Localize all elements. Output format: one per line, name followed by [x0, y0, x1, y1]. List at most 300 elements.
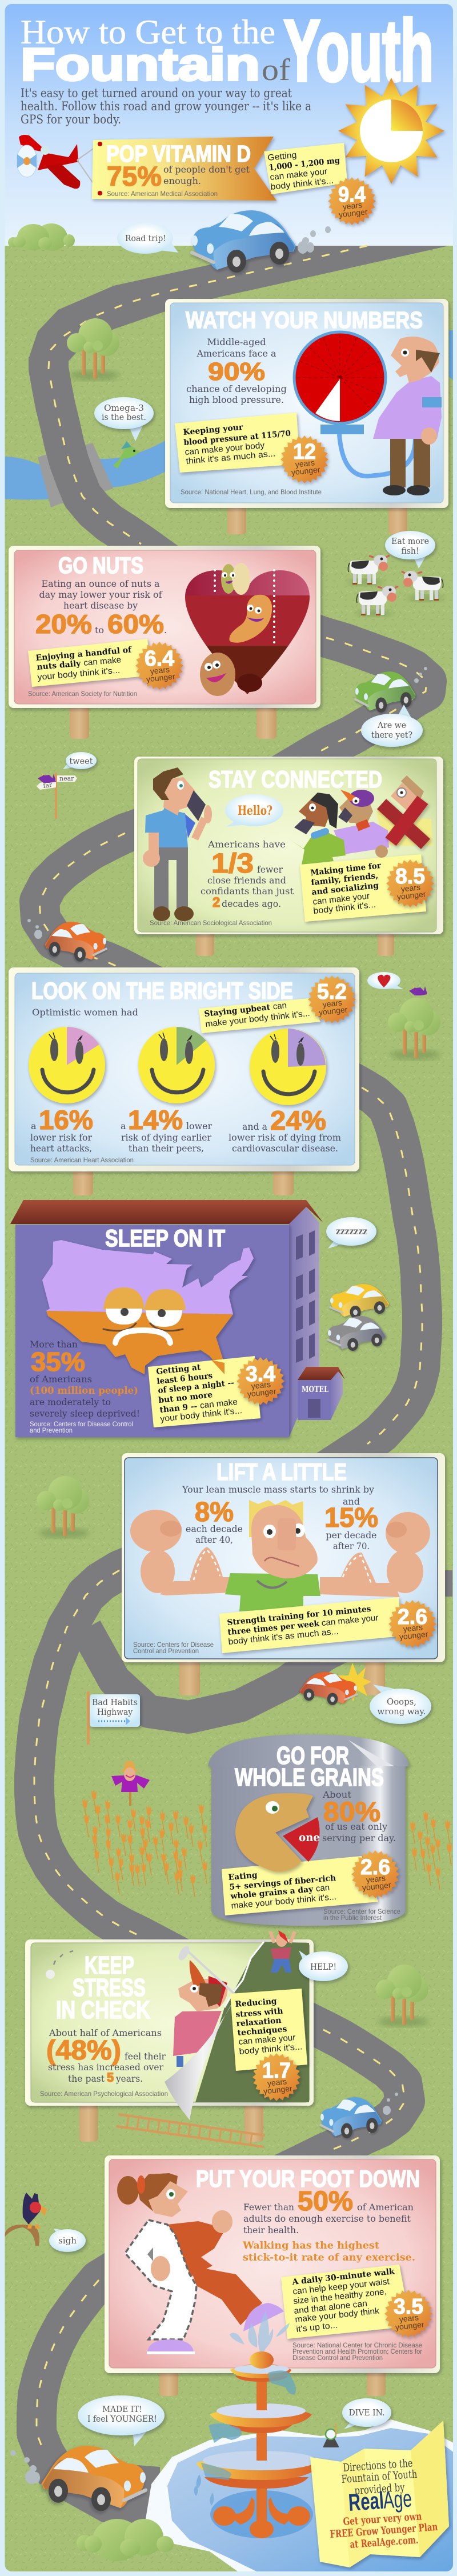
speech bubble: tweet — [63, 752, 97, 769]
signpost: near and far: far — [43, 781, 53, 790]
note: grains: whole grains a day — [230, 1885, 314, 1901]
stat text — [322, 1789, 396, 1843]
stat: 24%: 24% — [270, 1105, 326, 1135]
note: strength: can make your — [321, 1613, 379, 1628]
note: upbeat: can — [272, 1001, 287, 1011]
icon: snorkeler — [323, 2424, 339, 2447]
bush — [77, 2519, 174, 2561]
panel: go nuts: 60% — [107, 609, 164, 639]
stat: 14%: 14% — [128, 1105, 183, 1135]
scarecrow — [111, 1761, 150, 1806]
speech bubble: road trip — [117, 223, 178, 254]
note: grains — [222, 1856, 378, 1915]
panel: put your foot down — [105, 2155, 440, 2396]
title: How to Get to the — [21, 13, 275, 51]
source: Source: American Psychological Association — [40, 2090, 168, 2098]
note: blood pressure: think it's as much as... — [186, 449, 276, 466]
stat text: day may lower your risk of — [39, 589, 163, 600]
stat text: chance of developing — [186, 383, 287, 394]
heading: STRESS — [73, 1974, 146, 2002]
source: and Prevention — [30, 1426, 73, 1434]
note: sleep: your body think it's... — [160, 1406, 243, 1424]
speech bubble: sigh: sigh — [58, 2235, 77, 2246]
stat text: About — [322, 1789, 352, 1800]
chart: smiley pie 24% — [250, 1029, 326, 1105]
speech bubble: eat more fish: fish! — [401, 546, 419, 556]
badge: 5.2 years younger: years — [322, 998, 343, 1009]
water spray — [230, 2311, 290, 2351]
badge: 3.5 years younger — [384, 2290, 432, 2338]
stat: 14%: risk of dying earlier — [121, 1132, 211, 1143]
note: stress: body think it's... — [239, 2042, 303, 2057]
stat text: 1/3 — [211, 849, 254, 879]
stat: 24% — [228, 1105, 341, 1154]
badge: 3.5 years younger: younger — [395, 2319, 425, 2331]
source: Control and Prevention — [133, 1647, 199, 1655]
note: nuts: can make — [83, 655, 122, 668]
stat text — [30, 1339, 140, 1419]
icon: fish — [113, 441, 139, 469]
stat: 15%: 15% — [324, 1503, 378, 1533]
heading: LOOK ON THE BRIGHT SIDE — [31, 977, 293, 1004]
intro text: It's easy to get turned around on your way to great — [21, 86, 292, 100]
callout: walking: stick-to-it rate of any exercise. — [243, 2252, 415, 2263]
panel: go nuts: to — [95, 625, 104, 635]
speech bubble: help: HELP! — [310, 1962, 336, 1972]
stat: 14%: lower — [186, 1121, 212, 1131]
stat 75%: 75% — [107, 162, 162, 192]
chart: US map — [42, 1240, 254, 1374]
badge: 8.5 years younger: younger — [396, 889, 427, 901]
icon: vulture on branch — [5, 2193, 48, 2246]
source: Source: National Center for Chronic Disease — [292, 2341, 422, 2349]
chart: smiley pie 14% — [138, 1027, 215, 1103]
river — [4, 440, 171, 499]
badge: 9.4 years younger: 9.4 — [338, 183, 366, 207]
torn dark panel — [195, 1942, 309, 2102]
note: grains: Eating — [228, 1871, 258, 1882]
stat text — [243, 2186, 414, 2235]
stat text: of Americans — [30, 1374, 92, 1385]
stat text: decades ago. — [222, 898, 281, 909]
stat: 15% — [324, 1496, 378, 1551]
stat text: are moderately to — [30, 1397, 111, 1407]
note: strength: Strength training for 10 minutes — [227, 1605, 371, 1627]
bridge — [38, 443, 113, 507]
banner: pop vitamin D: Source: American Medical Association — [107, 190, 218, 198]
cows — [347, 555, 444, 617]
speech bubble: road trip: Road trip! — [125, 233, 166, 243]
heading: STAY CONNECTED — [209, 766, 382, 793]
note: sleep: than 9 -- — [159, 1402, 198, 1415]
badge: 9.4 years younger: younger — [338, 207, 368, 219]
badge: 5.2 years younger — [308, 975, 356, 1023]
badge: 12 years younger: younger — [291, 465, 320, 477]
speech bubble: are we there yet: Are we — [377, 720, 406, 730]
note: stress: can make your — [238, 2033, 296, 2047]
map: directions: Directions to the — [343, 2457, 413, 2474]
speech bubble: hello — [225, 794, 283, 827]
title — [22, 16, 431, 83]
speech bubble: help — [299, 1950, 348, 1981]
stat: 24%: cardiovascular disease. — [232, 1143, 338, 1154]
source: Source: American Heart Association — [30, 1156, 134, 1164]
badge: 3.4 years younger: years — [251, 1379, 271, 1391]
source: Source: American Society for Nutrition — [28, 690, 137, 698]
speech bubble: ooops — [370, 1685, 431, 1724]
badge: 1.7 years younger — [252, 2053, 300, 2101]
badge: 9.4 years younger — [328, 177, 376, 225]
badge: 1.7 years younger: younger — [263, 2083, 293, 2095]
map: directions: Get your very own — [343, 2510, 422, 2528]
note: sleep: least 6 hours — [157, 1371, 213, 1386]
speech bubble: ooops: wrong way. — [377, 1706, 426, 1717]
stat text: stress has increased over — [48, 2062, 163, 2073]
middle tier — [209, 2383, 312, 2443]
speech bubble: are we there yet: there yet? — [371, 730, 412, 740]
map: directions: provided by — [354, 2481, 405, 2497]
speech bubble: zzz: zzzzzzz — [336, 1226, 367, 1237]
stat text: 50% — [298, 2186, 353, 2217]
note: stress: techniques — [237, 2025, 287, 2038]
stat text: high blood pressure. — [189, 394, 284, 405]
note: strength — [219, 1597, 402, 1653]
source: Prevention and Health Promotion; Centers for — [292, 2347, 422, 2355]
stat text: of us eat only — [325, 1821, 387, 1832]
car: small blue — [320, 2093, 398, 2138]
figure: man with cuff — [373, 337, 442, 495]
tree — [37, 1476, 89, 1538]
note: vitamin D: Getting — [267, 150, 297, 163]
map: directions: Fountain of Youth — [341, 2468, 418, 2486]
source — [30, 1420, 133, 1434]
stat: 24%: lower risk of dying from — [228, 1132, 341, 1143]
speech bubble: tweet: tweet — [70, 756, 93, 766]
source: Source: Centers for Disease Control — [30, 1420, 133, 1428]
speech bubble: omega-3: is the best. — [102, 412, 146, 422]
map: directions — [310, 2421, 449, 2567]
stat: 14%: than their peers, — [129, 1143, 204, 1154]
stat text: 35% — [31, 1347, 85, 1377]
note: stress — [230, 1989, 307, 2071]
speech bubble: eat more fish — [385, 531, 435, 569]
heading: SLEEP ON IT — [105, 1225, 225, 1251]
top tier — [230, 2351, 296, 2394]
panel: sleep on it motel building — [10, 1200, 323, 1437]
figure: walking woman — [117, 2173, 284, 2354]
badge: 3.4 years younger: younger — [247, 1386, 276, 1398]
title: of — [262, 53, 290, 87]
speech bubble: made it: I feel YOUNGER! — [87, 2414, 157, 2424]
panel: keep stress in check — [25, 1939, 314, 2142]
stat text: feel their — [125, 2051, 166, 2062]
panel: go nuts — [9, 546, 320, 739]
note: nuts: nuts daily — [37, 659, 82, 672]
source: Source: Center for Science — [323, 1907, 400, 1915]
badge: 9.4 years younger: years — [342, 200, 363, 211]
bottom tier — [194, 2434, 320, 2506]
car: yellow — [330, 1284, 389, 1318]
note: blood pressure: Keeping your — [183, 423, 244, 437]
note: connected: Making time for — [310, 861, 382, 878]
badge: 8.5 years younger — [386, 859, 434, 907]
stat: 16%: a — [31, 1121, 37, 1131]
heading: POP VITAMIN D — [106, 141, 251, 167]
heading: LIFT A LITTLE — [217, 1458, 347, 1485]
note: connected: family, friends, — [311, 871, 379, 887]
note: grains: make your body think it's... — [231, 1892, 337, 1911]
signpost: near and far: near — [59, 775, 74, 782]
source: in the Public Interest — [323, 1914, 382, 1922]
stat text — [186, 337, 287, 405]
stat text: serving per day. — [322, 1833, 396, 1843]
badge: 12 years younger: years — [295, 458, 315, 469]
note: nuts: your body think it's... — [37, 665, 121, 682]
speech bubble: hello: Hello? — [238, 803, 272, 818]
tree — [376, 1965, 428, 2027]
panel: lift a little — [122, 1453, 445, 1695]
stat: 15%: and — [343, 1496, 360, 1507]
stat text: More than — [30, 1339, 78, 1350]
panel: go for whole grains silo: WHOLE GRAINS — [235, 1763, 384, 1791]
golf ball with dashed arc — [46, 1951, 73, 1979]
note: sleep: Getting at — [156, 1363, 202, 1377]
stat text: years. — [115, 2073, 143, 2084]
note: sleep: but no more — [158, 1390, 213, 1405]
pond — [146, 2419, 455, 2574]
badge: 1.7 years younger: years — [267, 2077, 287, 2088]
heading: GO NUTS — [58, 553, 143, 578]
heading — [56, 1951, 150, 2024]
note: sleep — [148, 1356, 260, 1427]
car: green — [355, 667, 427, 713]
note: walking: can help keep your waist — [292, 2277, 390, 2297]
note: walking: and that alone can — [294, 2299, 368, 2316]
stat text: fewer — [257, 864, 283, 875]
stat text: About half of Americans — [49, 2027, 162, 2038]
note: stress: Reducing — [235, 1997, 277, 2009]
heading: GO FOR — [276, 1742, 349, 1770]
stat text: their health. — [243, 2225, 299, 2235]
figure: man with small arms — [130, 1500, 430, 1611]
chart: blood pressure gauge pie — [294, 332, 420, 476]
bad habits highway branch — [86, 1629, 366, 1717]
icon: red X — [382, 800, 426, 844]
stat text: close friends and — [207, 875, 286, 886]
stat text: 2 — [213, 895, 220, 910]
badge: 3.5 years younger: years — [399, 2313, 419, 2324]
panel: go nuts: 20% — [35, 609, 92, 639]
figure: man on phone — [143, 767, 212, 921]
car: gray — [328, 1316, 386, 1351]
stat text: of American — [357, 2202, 414, 2213]
stat text: the past — [68, 2073, 105, 2084]
logo: RealAge: Age — [382, 2485, 412, 2514]
banner: pop vitamin D — [92, 137, 276, 201]
logo: RealAge: Real — [347, 2487, 384, 2516]
note: vitamin D: can make your — [270, 167, 328, 182]
bush — [8, 223, 75, 251]
signpost: near and far — [37, 772, 77, 819]
note: sleep: can make — [199, 1397, 238, 1411]
icon: ladder — [117, 2114, 265, 2147]
stat text: (100 million people) — [30, 1385, 138, 1397]
tree — [67, 318, 119, 381]
stat text: 80% — [323, 1797, 380, 1827]
badge: 6.4 years younger: younger — [146, 671, 176, 683]
badge: 3.5 years younger: 3.5 — [394, 2295, 423, 2319]
badge: 2.6 years younger: younger — [362, 1880, 392, 1892]
heading: KEEP — [85, 1951, 134, 1979]
source — [133, 1641, 214, 1655]
note: blood pressure — [175, 413, 300, 473]
stat text: Fewer than — [243, 2202, 294, 2213]
stat text — [201, 839, 294, 910]
stat: 8%: 8% — [195, 1497, 234, 1527]
speech bubble: made it — [78, 2395, 165, 2446]
speech bubble: omega-3 — [94, 397, 154, 441]
banner: pop vitamin D: of people don't get — [163, 164, 250, 175]
stat text: heart disease by — [63, 600, 138, 611]
speech bubble: ooops: Ooops, — [387, 1697, 416, 1707]
badge: 5.2 years younger: 5.2 — [317, 980, 347, 1004]
stat: 8% — [186, 1497, 243, 1545]
title: Fountain — [21, 39, 260, 90]
car: blue — [192, 210, 331, 273]
source: Disease Control and Prevention — [292, 2354, 383, 2362]
note: strength: three times per week — [227, 1619, 320, 1637]
stat text: Middle-aged — [207, 337, 266, 347]
stat: 14% — [121, 1105, 212, 1154]
intro text: health. Follow this road and grow younger -- it's like a — [21, 99, 311, 113]
tree with bird — [388, 985, 440, 1060]
badge: 6.4 years younger — [135, 642, 183, 690]
note: walking: it's up to... — [296, 2320, 338, 2334]
badge: 8.5 years younger: 8.5 — [395, 865, 425, 889]
note: connected: body think it's... — [313, 900, 376, 916]
source — [292, 2341, 422, 2362]
peeling page — [165, 1989, 240, 2120]
note: nuts — [28, 639, 151, 687]
badge: 8.5 years younger: years — [400, 882, 421, 894]
stat text: Americans have — [207, 839, 286, 850]
stat text: (48%) — [46, 2035, 121, 2066]
speech bubble: are we there yet — [361, 705, 423, 747]
badge: 2.6 years younger — [388, 1600, 436, 1648]
note: blood pressure: blood pressure at 115/70 — [183, 429, 291, 447]
panel: go nuts: . — [164, 625, 167, 635]
icon: sun pie chart — [338, 78, 444, 184]
banner: pop vitamin D: enough. — [163, 175, 201, 186]
panel: lift a little: Your lean muscle mass starts to shrink by — [182, 1484, 374, 1495]
stat: 15%: per decade — [326, 1530, 377, 1541]
panel: stay connected — [134, 757, 443, 956]
stat: 15%: after 70. — [333, 1541, 370, 1551]
speech bubble: zzz — [326, 1217, 376, 1249]
note: walking: make your body think — [295, 2306, 380, 2325]
chart: smiley pie 16% — [29, 1027, 105, 1103]
stat text: 5 — [107, 2070, 114, 2085]
speech bubble: dive in — [342, 2398, 391, 2429]
badge: 5.2 years younger: younger — [318, 1005, 348, 1017]
speech bubble: sigh — [49, 2229, 86, 2252]
stat: 24%: and a — [242, 1121, 267, 1132]
motel sign building — [298, 1367, 345, 1420]
figure: man on cliff — [270, 1930, 295, 1973]
note: walking — [281, 2265, 411, 2339]
speech bubble: dive in: DIVE IN. — [348, 2407, 385, 2418]
chart: pac-man pie — [235, 1793, 320, 1871]
stat text: Eating an ounce of nuts a — [41, 578, 160, 589]
sign: bad habits highway: Bad Habits — [92, 1697, 138, 1707]
sign: bad habits highway: Highway — [97, 1707, 133, 1717]
note: vitamin D: body think it's... — [270, 175, 334, 192]
stat text: adults do enough exercise to benefit — [243, 2213, 411, 2224]
note: upbeat — [199, 998, 320, 1033]
stat: 14%: a — [121, 1121, 126, 1131]
stat: 8%: after 40, — [195, 1534, 233, 1545]
badge: 2.6 years younger: 2.6 — [360, 1855, 390, 1879]
figure: group with phones, crossed out — [288, 775, 432, 865]
note: strength: body think it's as much as... — [228, 1626, 339, 1647]
car: crashed red — [300, 1672, 357, 1705]
panel: look on the bright side — [9, 967, 359, 1195]
stat text: severely sleep deprived! — [30, 1408, 140, 1419]
stat text — [46, 2027, 166, 2085]
stat: 16% — [30, 1105, 93, 1154]
source: Source: American Sociological Association — [150, 919, 272, 927]
note: sleep: of sleep a night -- — [158, 1378, 235, 1395]
note: stress: relaxation — [236, 2016, 282, 2029]
note: upbeat: make your body think it's... — [205, 1009, 310, 1029]
badge: 3.4 years younger — [236, 1357, 284, 1405]
note: connected — [300, 854, 426, 922]
source — [323, 1907, 400, 1922]
note: grains: can — [315, 1883, 330, 1894]
stat: 8%: each decade — [186, 1523, 243, 1534]
note: connected: can make your — [312, 891, 370, 907]
note: vitamin D — [264, 143, 347, 194]
fountain — [194, 2311, 320, 2538]
car: red-orange — [27, 919, 106, 962]
note: stress: stress with — [235, 2007, 283, 2019]
note: walking: size in the healthy zone, — [293, 2287, 387, 2306]
speech bubble: heart — [367, 972, 403, 989]
badge: 2.6 years younger — [351, 1850, 399, 1898]
note: blood pressure: can make your body — [185, 441, 265, 457]
car: big orange — [10, 2446, 146, 2511]
badge: 2.6 years younger: years — [403, 1622, 423, 1634]
stat: 16%: heart attacks, — [30, 1143, 92, 1154]
panel: look on the bright side: Optimistic women had — [32, 1007, 138, 1018]
badge: 12 years younger — [280, 435, 328, 483]
intro text: GPS for your body. — [21, 113, 121, 126]
map: directions: at RealAge.com. — [350, 2534, 419, 2551]
stat text: 90% — [208, 358, 265, 386]
callout: walking — [242, 2240, 415, 2263]
badge: 2.6 years younger: younger — [399, 1629, 428, 1641]
stat text — [39, 578, 163, 611]
source: Source: Centers for Disease — [133, 1641, 214, 1649]
crash star — [338, 1663, 371, 1702]
heading: IN CHECK — [56, 1996, 150, 2024]
note: grains: 5+ servings of fiber-rich — [229, 1874, 336, 1892]
note: walking: A daily 30-minute walk — [291, 2267, 395, 2287]
figure: golfer — [173, 1944, 235, 2067]
stat: 16%: lower risk for — [30, 1132, 92, 1143]
speech bubble: made it: MADE IT! — [102, 2404, 142, 2414]
stat: 16%: 16% — [39, 1105, 93, 1135]
